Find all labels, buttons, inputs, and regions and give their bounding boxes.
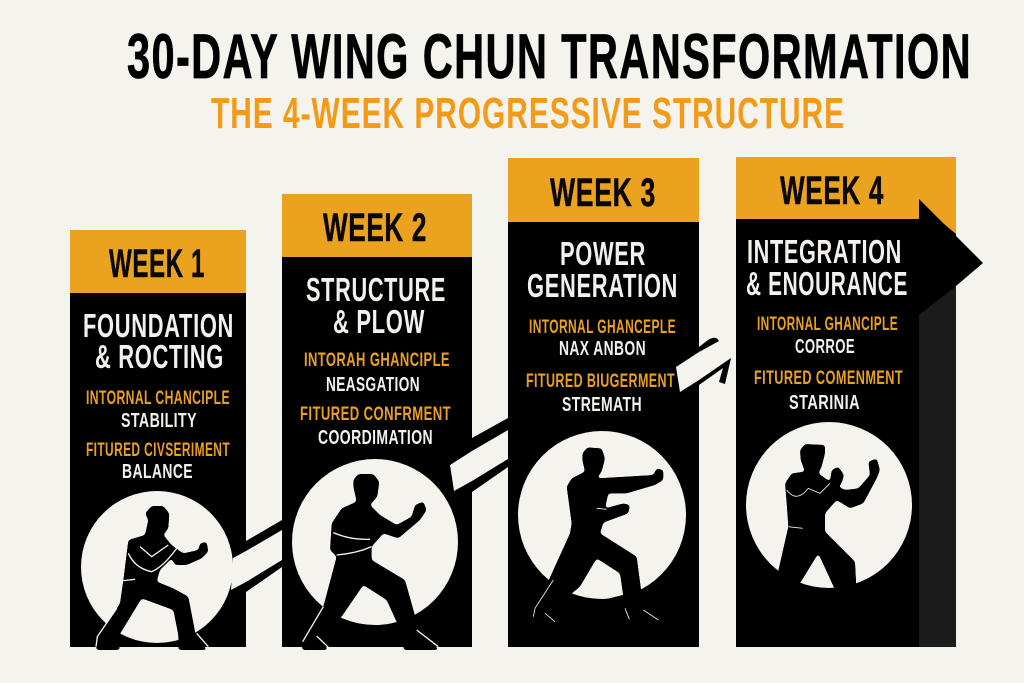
panel: week 1	[70, 230, 246, 650]
icon: week 3 fighter silhouette	[533, 447, 663, 622]
week 2 focus: COORDIMATION	[318, 427, 433, 449]
connector: week 3 to week 4	[699, 338, 731, 385]
week 4 principle: INTORNAL GHANCIPLE	[757, 314, 898, 335]
week 4 label: WEEK 4	[780, 169, 884, 213]
week 2 heading: & PLOW	[333, 303, 425, 340]
week 2 heading: STRUCTURE	[306, 271, 446, 308]
arrow head	[919, 199, 983, 315]
panel: week 3	[508, 158, 699, 647]
week 1 heading	[83, 307, 234, 375]
week 1 focus	[86, 440, 230, 483]
week 3 heading: POWER	[560, 235, 646, 272]
week 4 heading: INTEGRATION	[747, 233, 902, 270]
icon: week 2 fighter silhouette	[302, 474, 440, 650]
week 1 principle: INTORNAL CHANCIPLE	[86, 388, 230, 409]
week 1 header band	[70, 230, 246, 293]
week 2 heading	[306, 271, 446, 340]
week 4 focus: FITURED COMENMENT	[754, 368, 903, 389]
week 2 header band	[282, 194, 472, 257]
week 4 circle	[746, 422, 912, 588]
connector: week 2 to week 3	[472, 418, 508, 492]
connector: week 1 to week 2	[246, 520, 282, 592]
week 2 principle	[304, 350, 450, 396]
week 3 principle: INTORNAL GHANCEPLE	[529, 317, 676, 338]
week 1 circle	[81, 491, 233, 643]
week 1 label: WEEK 1	[109, 242, 205, 286]
week 2 focus: FITURED CONFRMENT	[300, 404, 451, 425]
week 4 heading	[746, 233, 908, 302]
week 4 focus: STARINIA	[789, 392, 860, 414]
week 2 label: WEEK 2	[323, 206, 427, 250]
week 1 principle	[86, 388, 230, 432]
week 4 heading: & ENOURANCE	[746, 265, 908, 302]
week 3 principle: NAX ANBON	[559, 338, 646, 360]
connector band cut into week 3	[676, 352, 699, 392]
week 3 heading	[527, 235, 678, 304]
week 4 focus	[754, 368, 903, 414]
week 1 focus: BALANCE	[122, 461, 193, 483]
connector band cut into week 2	[450, 451, 472, 491]
week 3 heading: GENERATION	[527, 267, 678, 304]
week 3 focus: FITURED BIUGERMENT	[526, 371, 675, 392]
icon: week 1 fighter silhouette	[96, 506, 208, 650]
panel: week 4 with arrow	[736, 157, 983, 647]
week 4 header band	[736, 157, 956, 234]
week 1 heading: FOUNDATION	[83, 307, 234, 344]
week 2 circle	[292, 459, 458, 625]
week 1 heading: & ROCTING	[95, 338, 224, 375]
week 1 principle: STABILITY	[121, 410, 197, 432]
week 4 principle	[757, 314, 898, 358]
week 4 shaded column	[919, 280, 956, 647]
week 3 focus	[526, 371, 675, 416]
week 2 principle: NEASGATION	[326, 374, 420, 396]
week 4 principle: CORROE	[795, 336, 855, 358]
connector band cut into week 1	[231, 551, 246, 590]
week 2 focus	[300, 404, 451, 449]
week 3 focus: STREMATH	[562, 394, 642, 416]
week 2 principle: INTORAH GHANCIPLE	[304, 350, 450, 371]
week 1 focus: FITURED CIVSERIMENT	[86, 440, 230, 461]
panel: week 2	[282, 194, 472, 650]
week 3 principle	[529, 317, 676, 360]
icon: week 4 fighter silhouette	[773, 444, 880, 593]
week 3 circle	[518, 431, 686, 599]
week 3 header band	[508, 158, 699, 222]
week 3 label: WEEK 3	[550, 171, 656, 215]
